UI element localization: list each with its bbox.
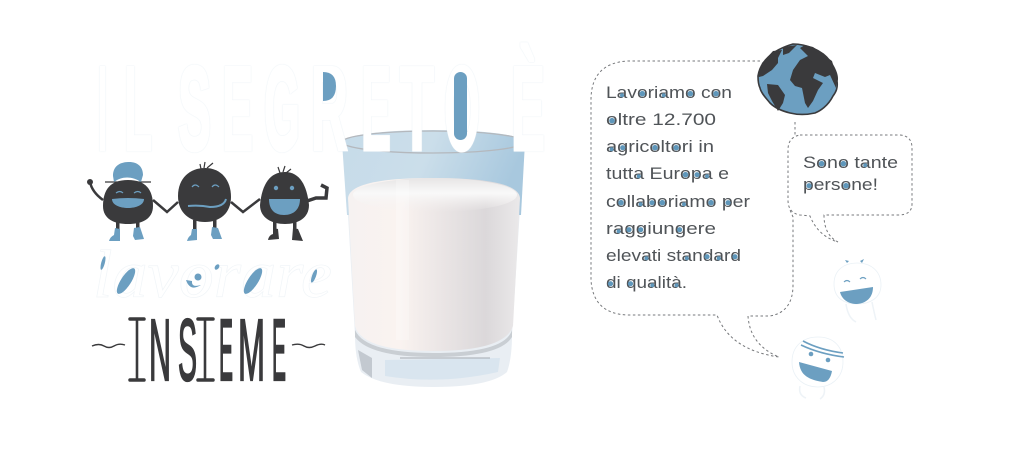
- character: middle: [178, 162, 260, 241]
- main bubble text: Lavoriamo con: [606, 84, 732, 102]
- main bubble text: di qualità.: [606, 274, 687, 292]
- main bubble text: agricoltori in: [606, 138, 714, 156]
- milk glass: [342, 130, 525, 387]
- main bubble text: oltre 12.700: [606, 111, 716, 129]
- title: il segreto è: E: [361, 42, 391, 176]
- title letter counters: [323, 72, 467, 140]
- word: insieme: I: [202, 302, 208, 399]
- word: insieme: E: [219, 302, 233, 399]
- speech bubble: small: [788, 135, 912, 242]
- main bubble text: tutta Europa e: [606, 165, 729, 183]
- character: boy with cap: [87, 162, 178, 241]
- icon: globe: [758, 44, 837, 114]
- blue letter fills: small bubble: [806, 161, 867, 188]
- small bubble text: persone!: [803, 176, 878, 194]
- main bubble text: [606, 84, 751, 292]
- title: il segreto è: I: [98, 42, 107, 176]
- character: strong arm: [260, 166, 327, 241]
- word: insieme: N: [149, 302, 171, 399]
- title: il segreto è: G: [264, 42, 300, 176]
- blue letter counters: [99, 256, 318, 296]
- title: il segreto è: R: [311, 42, 348, 176]
- title: il segreto è: [98, 42, 545, 176]
- glass base details: [355, 330, 512, 357]
- word: insieme: M: [238, 302, 265, 399]
- small bubble text: Sono tante: [803, 154, 898, 172]
- title: il segreto è: T: [400, 42, 434, 176]
- word: insieme: I: [134, 302, 140, 399]
- speech bubble: main: [591, 61, 795, 357]
- word: insieme: S: [178, 302, 197, 399]
- title: il segreto è: O: [444, 42, 480, 176]
- character: white smiling: [834, 259, 881, 322]
- script word: lavorare: lavorare: [93, 236, 332, 312]
- word: insieme: [92, 302, 325, 399]
- title: il segreto è: S: [178, 42, 211, 176]
- title: il segreto è: L: [124, 42, 152, 176]
- word: insieme: E: [272, 302, 286, 399]
- blue letter fills: main bubble: [608, 91, 738, 287]
- character: white with headband: [792, 337, 844, 399]
- main bubble text: elevati standard: [606, 247, 741, 265]
- infographic canvas: È: [511, 42, 545, 176]
- main bubble text: raggiungere: [606, 220, 716, 238]
- title: il segreto è: E: [222, 42, 253, 176]
- small bubble text: [803, 154, 898, 194]
- main bubble text: collaboriamo per: [606, 193, 751, 211]
